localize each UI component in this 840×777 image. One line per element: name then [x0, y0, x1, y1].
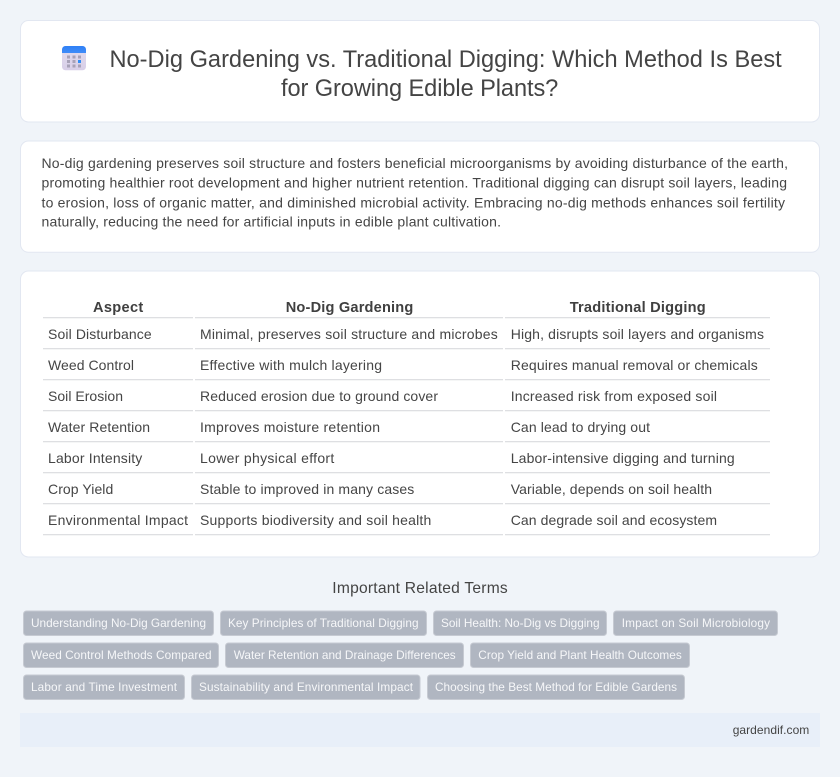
tag [24, 611, 214, 636]
row: labor intensity [48, 450, 735, 466]
tag [24, 675, 184, 700]
tag: Crop Yield and Plant Health Outcomes [478, 648, 682, 662]
heading: important related terms: Important Related Terms [332, 580, 508, 597]
row: environmental impact: Supports biodiversity and soil health [200, 512, 431, 528]
tag: Sustainability and Environmental Impact [199, 680, 414, 694]
row: water retention: Can lead to drying out [511, 419, 650, 435]
tag: Weed Control Methods Compared [31, 648, 212, 662]
panel: intro text [20, 141, 820, 252]
text block: intro paragraph: promoting healthier root development and higher nutrient retention. Traditional digging can disrupt soil layers, leading [42, 174, 787, 190]
row: environmental impact: Environmental Impact [48, 512, 188, 528]
row: water retention: Water Retention [48, 419, 150, 435]
row: soil erosion: Increased risk from exposed soil [511, 388, 717, 404]
title: for Growing Edible Plants? [281, 76, 558, 102]
tag: Key Principles of Traditional Digging [228, 616, 418, 630]
row: labor intensity: Labor-intensive digging and turning [511, 450, 735, 466]
table header: Aspect [93, 300, 143, 316]
tag [614, 611, 778, 636]
text block: intro paragraph [42, 155, 788, 230]
footer: gardendif.com [733, 723, 809, 737]
title: No-Dig Gardening vs. Traditional Digging: Which Method Is Best [110, 47, 782, 73]
tag: Labor and Time Investment [31, 680, 178, 694]
row: soil disturbance: High, disrupts soil layers and organisms [511, 326, 764, 342]
tag: Choosing the Best Method for Edible Gardens [435, 680, 677, 694]
tag [434, 611, 606, 636]
panel: related term tags [24, 611, 778, 700]
tag [24, 643, 218, 668]
row: soil erosion [48, 388, 717, 404]
row: soil disturbance: Soil Disturbance [48, 326, 152, 342]
row: weed control: Requires manual removal or chemicals [511, 357, 758, 373]
row: crop yield [48, 481, 712, 497]
text block: intro paragraph: naturally, reducing the need for artificial inputs in edible plant cultivation. [42, 214, 501, 230]
row: labor intensity: Lower physical effort [200, 450, 334, 466]
tag [470, 643, 690, 668]
row: soil erosion: Soil Erosion [48, 388, 123, 404]
panel: comparison table [20, 271, 820, 557]
row: crop yield: Variable, depends on soil health [511, 481, 712, 497]
row: labor intensity: Labor Intensity [48, 450, 142, 466]
tag: Soil Health: No-Dig vs Digging [441, 616, 600, 630]
icon: calendar [62, 46, 86, 70]
row: environmental impact [48, 512, 717, 528]
row: soil disturbance [48, 326, 764, 342]
tag: Understanding No-Dig Gardening [31, 616, 206, 630]
text block: intro paragraph: No-dig gardening preserves soil structure and fosters beneficial microorganisms by avoiding disturbance of the earth, [42, 155, 788, 171]
row: weed control: Effective with mulch layering [200, 357, 382, 373]
tag: Impact on Soil Microbiology [622, 616, 770, 630]
table header [93, 300, 706, 316]
footer [20, 713, 820, 747]
tag [428, 675, 684, 700]
panel: header [20, 20, 820, 122]
tag: Water Retention and Drainage Differences [234, 648, 456, 662]
row: water retention [48, 419, 650, 435]
row: weed control: Weed Control [48, 357, 134, 373]
row: soil erosion: Reduced erosion due to ground cover [200, 388, 438, 404]
row: soil disturbance: Minimal, preserves soil structure and microbes [200, 326, 498, 342]
table header: Traditional Digging [570, 300, 706, 316]
title [110, 47, 782, 102]
text block: intro paragraph: to erosion, loss of organic matter, and diminished microbial activity. Embracing no-dig methods enhances soil fertility [42, 194, 785, 210]
tag [226, 643, 464, 668]
tag [192, 675, 420, 700]
row: crop yield: Stable to improved in many cases [200, 481, 414, 497]
row: crop yield: Crop Yield [48, 481, 113, 497]
tag [220, 611, 426, 636]
row: weed control [48, 357, 758, 373]
row: environmental impact: Can degrade soil and ecosystem [511, 512, 717, 528]
row: water retention: Improves moisture retention [200, 419, 380, 435]
table header: No-Dig Gardening [286, 300, 413, 316]
